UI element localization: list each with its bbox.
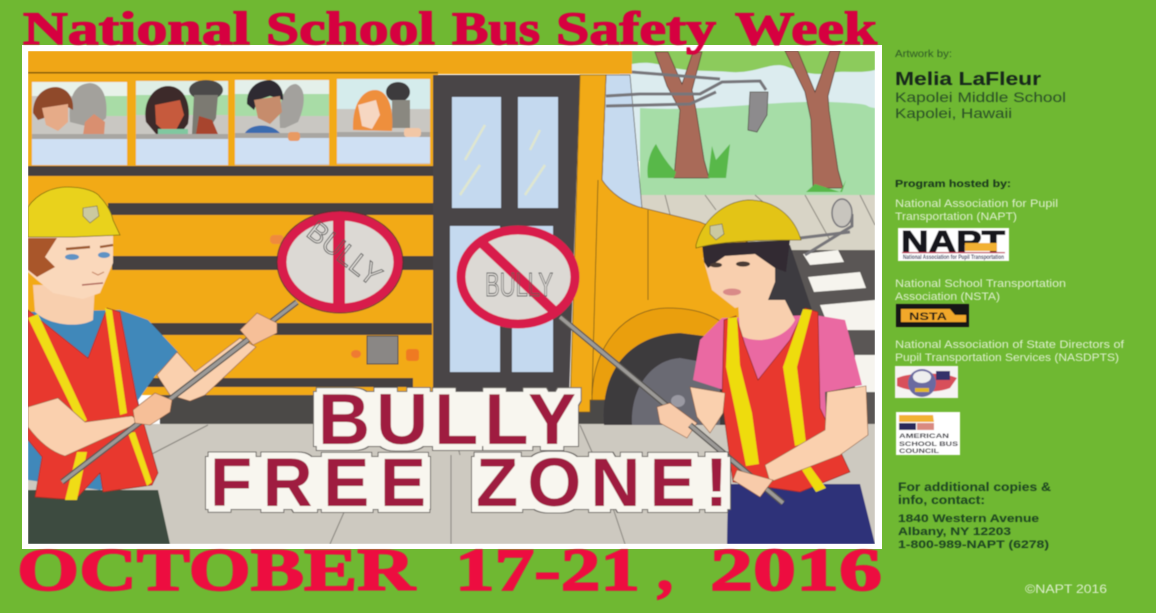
sidebar: program hosts: National Association for Pupil xyxy=(895,198,1058,210)
boy shirt xyxy=(28,310,178,490)
girl shirt xyxy=(693,315,862,480)
girl right arm xyxy=(765,386,868,482)
boy raised arm xyxy=(157,338,256,401)
boy hair xyxy=(28,238,57,277)
left sign: BULLY xyxy=(301,215,387,293)
boy lower arm xyxy=(28,398,140,456)
girl neck xyxy=(738,300,795,340)
title: School xyxy=(266,3,435,55)
window 2 xyxy=(136,80,228,165)
girl lower pole xyxy=(690,425,783,503)
date banner: 2016 xyxy=(710,537,882,603)
sidebar: program hosts: National School Transportation xyxy=(895,278,1066,290)
date banner xyxy=(17,537,882,603)
title xyxy=(23,3,878,55)
sidebar: program hosts xyxy=(895,178,1125,455)
slogan line 2: FREE xyxy=(210,444,426,521)
title: Week xyxy=(735,3,878,55)
bus front and hood xyxy=(570,74,748,413)
copyright: ©NAPT 2016 xyxy=(1025,584,1107,596)
bus body xyxy=(28,51,632,395)
date banner: OCTOBER xyxy=(17,537,416,603)
sidebar: contact information: 1-800-989-NAPT (6278) xyxy=(898,539,1049,551)
boy eyes and mouth xyxy=(65,245,113,285)
logo: NAPT: National Association for Pupil Transportation xyxy=(903,255,1004,261)
side mirror glass xyxy=(748,92,768,132)
boy face xyxy=(28,235,113,299)
boy raised hand xyxy=(240,313,277,345)
girl vest xyxy=(722,308,850,492)
slogan line 1: BULLY xyxy=(318,380,576,460)
boy neck xyxy=(33,285,95,325)
logo: NASDPTS xyxy=(895,366,958,398)
logo: NSTA xyxy=(896,304,969,327)
sidebar: artist credit: Kapolei Middle School xyxy=(895,89,1066,105)
slogan line 3: ZONE! xyxy=(476,444,728,521)
window 1 xyxy=(32,82,127,165)
girl fringe xyxy=(702,240,790,272)
boy vest xyxy=(28,308,158,500)
logo: American School Bus Council xyxy=(896,412,960,455)
window 3 xyxy=(235,80,329,165)
window 4 xyxy=(337,79,430,164)
sidebar: program hosts: National Association of State Directors of xyxy=(895,339,1125,351)
bus underside shadow xyxy=(160,395,610,424)
sidebar: program hosts: Program hosted by: xyxy=(895,178,1011,190)
left sign xyxy=(277,211,403,313)
sidebar: contact information: Albany, NY 12203 xyxy=(898,526,1011,538)
girl left hand xyxy=(657,403,697,438)
right sign xyxy=(456,224,668,406)
bus side stripes xyxy=(28,166,436,387)
grass tufts xyxy=(647,144,846,192)
sidebar: program hosts: Association (NSTA) xyxy=(895,291,1000,303)
background trees xyxy=(655,51,843,188)
title: National xyxy=(23,3,250,55)
sidebar: artist credit xyxy=(895,49,1066,121)
logo: NAPT: NAPT xyxy=(901,224,1005,259)
girl helmet badge xyxy=(710,224,724,240)
bus door xyxy=(433,75,580,425)
girl face xyxy=(703,250,775,308)
sidebar: contact information: 1840 Western Avenue xyxy=(898,513,1039,525)
bus windows with students xyxy=(32,79,430,165)
girl eyes and mouth xyxy=(710,261,750,296)
boy lower hand xyxy=(133,393,172,425)
windshield xyxy=(602,75,642,208)
date banner: , xyxy=(657,537,673,603)
right sign: BULLY xyxy=(485,266,553,303)
sidebar: program hosts: Pupil Transportation Services (NASDPTS) xyxy=(895,352,1119,364)
girl hair xyxy=(703,245,815,345)
background: sky, foliage and grass xyxy=(620,51,875,195)
boy vest reflective stripes xyxy=(28,308,152,500)
sidebar: contact information: For additional copies & xyxy=(898,482,1051,494)
date banner: 17-21 xyxy=(455,537,640,603)
sidebar: contact information xyxy=(898,482,1051,551)
girl lower hand xyxy=(733,470,773,497)
sidebar: contact information: info, contact: xyxy=(898,495,985,507)
sidebar: artist credit: Artwork by: xyxy=(895,49,952,60)
girl helmet xyxy=(696,200,801,248)
boy sign pole xyxy=(62,302,297,482)
front wheel xyxy=(592,308,735,425)
slogan: bully free zone xyxy=(210,380,728,521)
girl vest reflective stripes xyxy=(726,309,826,492)
girl crossing guard xyxy=(657,200,875,544)
bus mirrors xyxy=(606,72,852,255)
logo: American School Bus Council: COUNCIL xyxy=(899,449,939,455)
title: Bus xyxy=(452,3,540,55)
girl pants xyxy=(727,484,875,544)
sidewalk xyxy=(28,424,875,544)
sidebar: artist credit: Melia LaFleur xyxy=(895,69,1041,89)
logo: American School Bus Council: AMERICAN xyxy=(899,434,949,440)
sidebar: program hosts: Transportation (NAPT) xyxy=(895,211,1017,223)
logo: American School Bus Council: SCHOOL BUS xyxy=(899,442,958,448)
artwork frame xyxy=(22,45,882,549)
artwork: bus safety illustration xyxy=(28,51,875,544)
bus lights and panel xyxy=(270,235,419,364)
pavement and crosswalk xyxy=(640,194,875,425)
boy helmet xyxy=(28,187,120,237)
sidebar: artist credit: Kapolei, Hawaii xyxy=(895,105,1012,121)
boy helmet badge xyxy=(83,206,99,223)
boy crossing guard xyxy=(28,187,297,544)
boy pants xyxy=(28,490,170,544)
logo: NSTA: NSTA xyxy=(909,311,947,323)
girl left forearm xyxy=(690,387,725,433)
title: Safety xyxy=(556,3,717,55)
